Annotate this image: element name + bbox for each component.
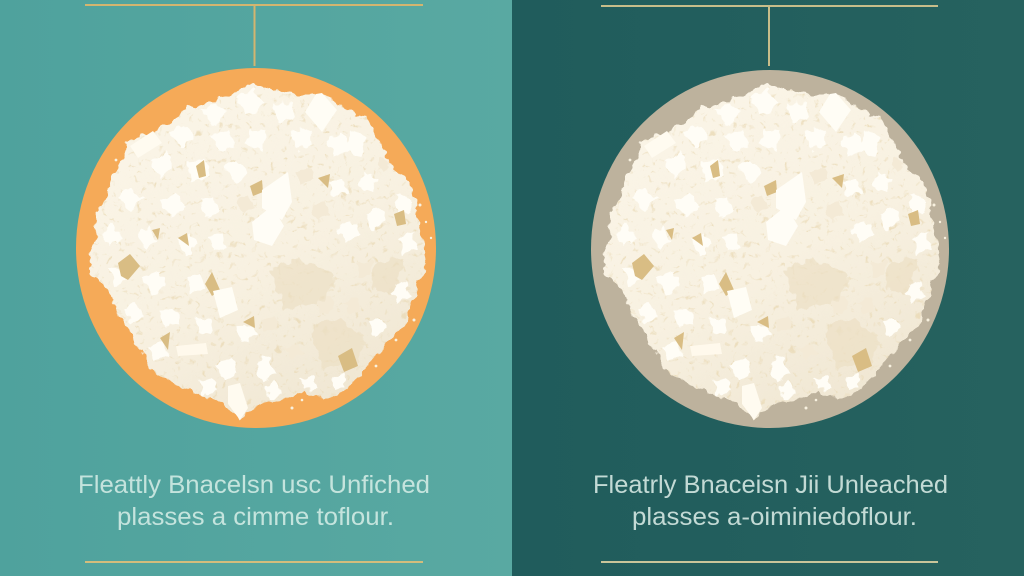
orange circle backdrop — [76, 68, 436, 428]
right caption: Fleatrly Bnaceisn Jii Unleached — [593, 471, 948, 499]
left caption: Fleattly Bnacelsn usc Unfiched — [78, 471, 430, 499]
left caption: plasses a cimme toflour. — [117, 503, 394, 531]
left top bracket line — [85, 5, 423, 66]
right bottom line — [601, 561, 938, 563]
right caption — [593, 471, 948, 531]
left caption — [78, 471, 430, 531]
taupe circle backdrop — [591, 70, 949, 428]
right caption: plasses a-oiminiedoflour. — [632, 503, 917, 531]
panel: right dark green background — [512, 0, 1024, 576]
left bottom line — [85, 561, 423, 563]
icon: flour pile, right — [594, 80, 946, 425]
icon: flour pile, left — [80, 80, 432, 425]
right top bracket line — [601, 6, 938, 66]
panel: left teal background — [0, 0, 512, 576]
